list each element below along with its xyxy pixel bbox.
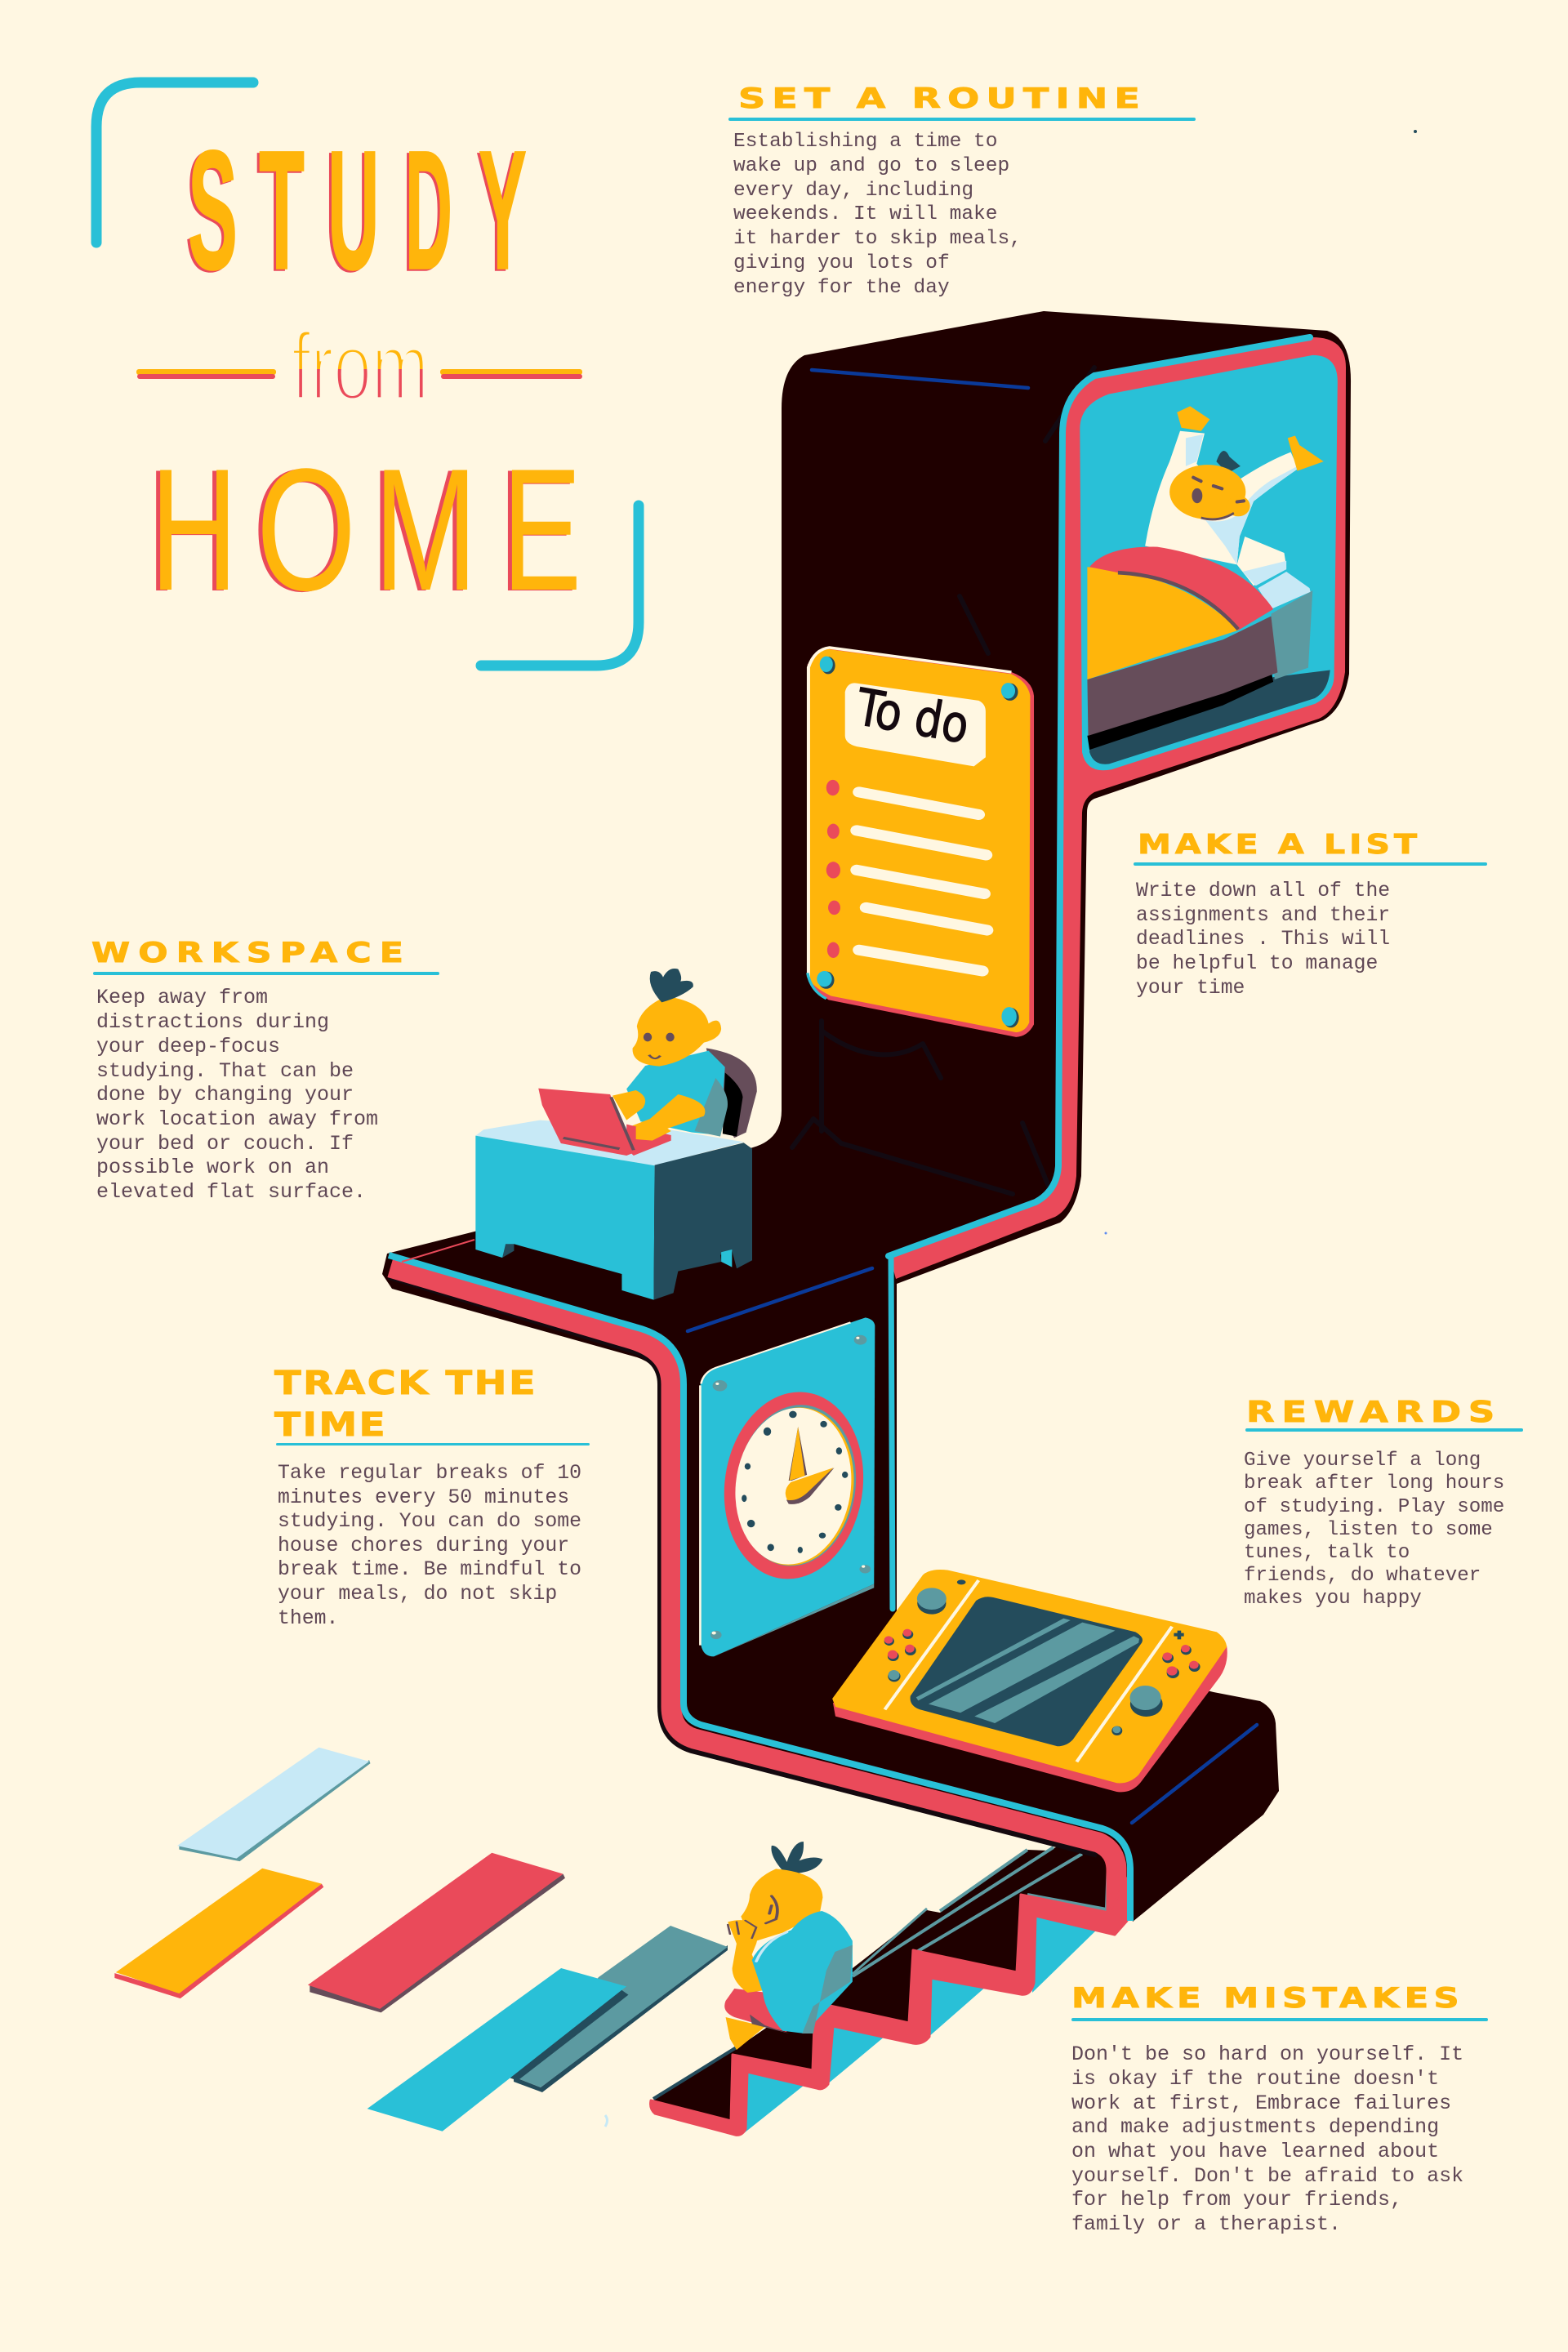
title dash right (440, 369, 582, 379)
heading rule (1071, 2018, 1488, 2021)
game console (832, 1570, 1227, 1792)
heading: make a list: MAKE A LIST (1138, 828, 1421, 860)
outline of the red rim (390, 1271, 1098, 1849)
heading: track the time: TIME (274, 1406, 387, 1444)
body text: friends, do whatever (1244, 1565, 1481, 1587)
body text: be helpful to manage (1136, 952, 1378, 975)
body text: assignments and their (1136, 904, 1390, 927)
faint scribble marks on tower (792, 368, 1094, 1194)
to do label: To do (852, 677, 973, 755)
title block: Y (479, 116, 527, 305)
heading rule (1245, 1428, 1523, 1432)
thin red accent line on shelf (402, 1240, 474, 1262)
character at desk with laptop (475, 969, 757, 1300)
title word home: E (498, 434, 577, 628)
section: workspace (91, 937, 439, 1204)
body text: elevated flat surface. (96, 1180, 366, 1204)
section: track the time (274, 1365, 590, 1630)
title word home: E (502, 433, 581, 627)
section: make a list (1134, 828, 1487, 1000)
title word home: M (374, 433, 477, 627)
body text: of studying. Play some (1244, 1496, 1504, 1518)
title word study: S (185, 118, 235, 307)
body text: giving you lots of (733, 252, 950, 274)
body text: and make adjustments depending (1071, 2115, 1439, 2139)
title word home: O (252, 434, 352, 628)
floating color strips (114, 1748, 728, 2132)
body text: Establishing a time to (733, 131, 997, 153)
strip: light blue (177, 1748, 370, 1861)
body text: your bed or couch. If (96, 1132, 354, 1156)
body text: Don't be so hard on yourself. It (1071, 2042, 1463, 2066)
body text: makes you happy (1244, 1588, 1422, 1610)
title word from: from (292, 313, 429, 420)
body text: your time (1136, 977, 1245, 1000)
body text: yourself. Don't be afraid to ask (1071, 2164, 1463, 2188)
section: set a routine (728, 82, 1196, 299)
red rim of the tower (890, 337, 1346, 1279)
title word study: T (256, 118, 302, 307)
title word home: H (146, 434, 234, 628)
cyan inner line of upper rim (889, 337, 1310, 1256)
title word home (146, 433, 581, 628)
body text: house chores during your (278, 1535, 569, 1557)
body text: done by changing your (96, 1083, 354, 1107)
body text: break after long hours (1244, 1472, 1504, 1494)
body text: them. (278, 1607, 338, 1630)
strip: teal (514, 1926, 728, 2092)
body text: break time. Be mindful to (278, 1558, 581, 1581)
to do card (808, 647, 1034, 1037)
body text: possible work on an (96, 1156, 329, 1179)
strip: red (308, 1853, 565, 2012)
body text: energy for the day (733, 277, 950, 299)
heading: rewards: REWARDS (1246, 1396, 1502, 1429)
body text: distractions during (96, 1010, 329, 1034)
cyan line of lower band (389, 1255, 1130, 1921)
red rim lower band (390, 1267, 1116, 1915)
title word home: M (370, 434, 474, 628)
title dash left (136, 369, 276, 379)
body text: Take regular breaks of 10 (278, 1462, 581, 1485)
title bracket top left (96, 82, 253, 243)
title word study: U (327, 116, 379, 305)
heading rule (1134, 862, 1487, 866)
title word study (185, 116, 527, 307)
body text: minutes every 50 minutes (278, 1486, 569, 1509)
heading: make mistakes: MAKE MISTAKES (1071, 1982, 1464, 2015)
body text: for help from your friends, (1071, 2188, 1402, 2212)
heading: set a routine: SET A ROUTINE (738, 82, 1147, 115)
heading rule (276, 1443, 590, 1446)
cyan shadow blocks under stairs (744, 1913, 1098, 2133)
dark tower silhouette (382, 311, 1351, 1922)
body text: your meals, do not skip (278, 1583, 557, 1606)
title word home: O (256, 433, 356, 627)
section: make mistakes (1071, 1982, 1488, 2236)
strip: yellow (114, 1869, 323, 1998)
heading: track the time: TRACK THE (274, 1365, 537, 1402)
title word study: D (403, 118, 450, 307)
body text: work location away from (96, 1107, 378, 1131)
strip: cyan (368, 1968, 628, 2132)
body text: your deep-focus (96, 1035, 280, 1058)
clock panel (700, 1317, 875, 1656)
heading: workspace: WORKSPACE (91, 937, 412, 969)
cyan right edge of lower tower (891, 1258, 893, 1609)
body text: tunes, talk to (1244, 1542, 1410, 1564)
heading rule (93, 972, 439, 975)
title word study: T (259, 116, 305, 305)
title block: Y (476, 118, 524, 307)
body text: weekends. It will make (733, 203, 997, 225)
body text: games, listen to some (1244, 1519, 1493, 1541)
body text: is okay if the routine doesn't (1071, 2067, 1439, 2091)
body text: studying. You can do some (278, 1510, 581, 1533)
title bracket bottom right (481, 506, 639, 666)
title word home: H (150, 433, 238, 627)
heading: track the time (274, 1365, 537, 1444)
body text: on what you have learned about (1071, 2140, 1439, 2163)
blue accent lines (688, 370, 1257, 1823)
body text: every day, including (733, 180, 973, 202)
stray specks (605, 130, 1417, 2127)
title block (96, 82, 639, 666)
body text: deadlines . This will (1136, 928, 1390, 951)
body text: wake up and go to sleep (733, 155, 1009, 177)
thinking character on stairs (724, 1842, 853, 2050)
body text: Write down all of the (1136, 880, 1390, 902)
body text: work at first, Embrace failures (1071, 2091, 1451, 2115)
stair treads (653, 1847, 1111, 2121)
body text: studying. That can be (96, 1059, 354, 1083)
title word study: D (405, 116, 452, 305)
body text: it harder to skip meals, (733, 228, 1022, 250)
red zigzag stairs (651, 1878, 1127, 2135)
title word study: U (325, 118, 377, 307)
body text: Give yourself a long (1244, 1450, 1481, 1472)
body text: family or a therapist. (1071, 2212, 1341, 2236)
title word study: S (188, 116, 238, 305)
window with waking person (1080, 356, 1337, 769)
section: rewards (1244, 1396, 1523, 1610)
body text: Keep away from (96, 986, 268, 1009)
heading rule (728, 118, 1196, 121)
